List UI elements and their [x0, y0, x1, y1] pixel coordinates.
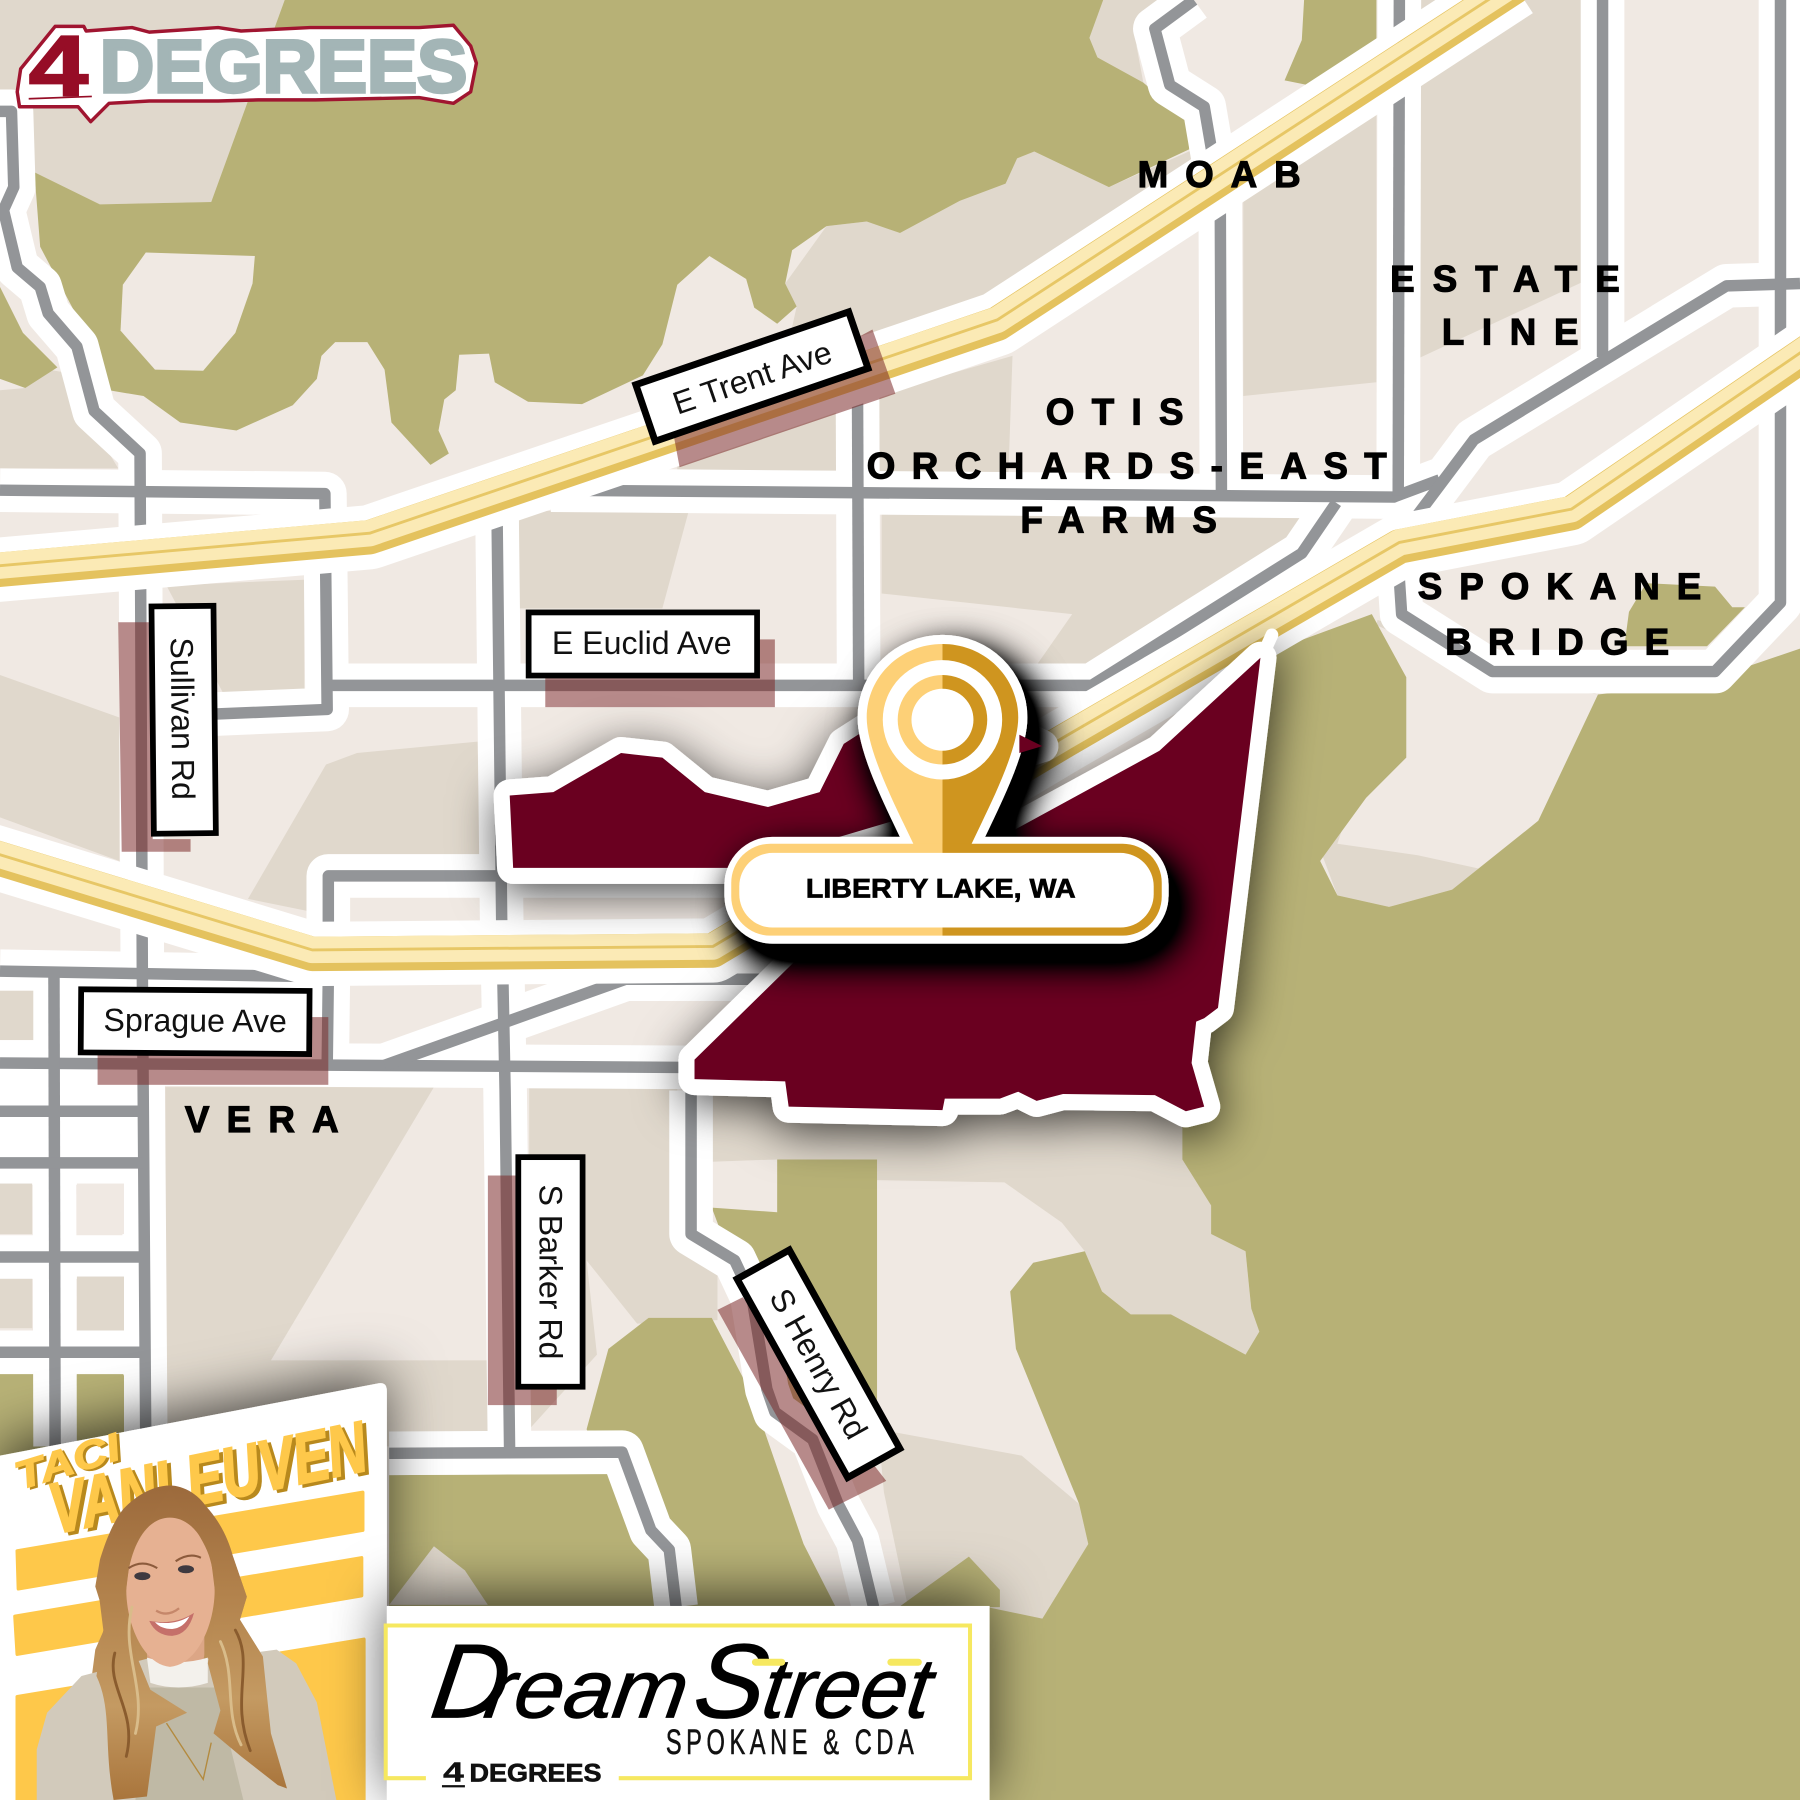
small 4 Degrees logo — [442, 1757, 602, 1788]
street sign: Sullivan Rd: Sullivan Rd — [164, 637, 201, 800]
neighborhood labels: ESTATE — [1390, 259, 1620, 300]
street sign: E Trent Ave: E Trent Ave — [668, 334, 836, 421]
street sign: S Barker Rd: S Barker Rd — [532, 1184, 568, 1359]
Dream Street wordmark: D — [425, 1623, 518, 1740]
neighborhood labels: LINE — [1442, 311, 1578, 352]
neighborhood labels: ORCHARDS-EAST — [867, 446, 1387, 487]
agent name: VANLEUVEN — [47, 1410, 378, 1552]
neighborhood labels: VERA — [185, 1099, 339, 1140]
boundary shape fill — [510, 658, 1260, 1111]
t-cross accents — [752, 1659, 922, 1666]
sweater — [37, 1650, 336, 1800]
street sign: Sprague Ave — [81, 989, 328, 1085]
facial features — [129, 1556, 201, 1636]
Dream Street wordmark — [425, 1623, 944, 1740]
map pin and location label: LIBERTY LAKE, WA — [806, 874, 1076, 904]
back hair — [92, 1485, 287, 1797]
neighborhood labels: SPOKANE — [1418, 566, 1701, 607]
highways — [0, 0, 1800, 954]
4 Degrees logo: 4 — [29, 18, 89, 114]
street sign: Sullivan Rd — [118, 606, 216, 852]
neck and collar — [147, 1624, 204, 1666]
face — [126, 1518, 215, 1667]
street sign: E Trent Ave — [636, 312, 895, 467]
agent portrait — [37, 1485, 336, 1800]
agent card — [0, 1383, 387, 1800]
agent name: TACI — [12, 1427, 130, 1500]
small 4 Degrees logo: DEGREES — [470, 1760, 602, 1788]
neighborhood labels: OTIS — [1046, 392, 1184, 433]
street sign: Sprague Ave: Sprague Ave — [103, 1002, 287, 1039]
agent name: VANLEUVEN — [43, 1408, 374, 1549]
brand card — [386, 1606, 990, 1800]
small 4 Degrees logo: 4 — [443, 1757, 465, 1788]
street sign: E Euclid Ave: E Euclid Ave — [552, 625, 732, 661]
boundary shape sliver beside pin — [1019, 735, 1042, 753]
Liberty Lake boundary shape — [510, 635, 1272, 1111]
Dream Street wordmark: S — [688, 1623, 775, 1740]
neighborhood labels: FARMS — [1021, 500, 1217, 541]
street sign: E Euclid Ave — [529, 612, 775, 707]
neighborhood labels — [185, 154, 1701, 1140]
tagline: SPOKANE & CDA — [666, 1722, 918, 1762]
neighborhood labels: BRIDGE — [1445, 621, 1669, 662]
street sign: S Barker Rd — [488, 1157, 583, 1405]
Dream Street wordmark: ream — [480, 1643, 695, 1735]
4 Degrees logo — [17, 18, 476, 122]
yellow frame — [386, 1626, 970, 1778]
neighborhood labels: MOAB — [1138, 154, 1301, 195]
agent name — [10, 1407, 378, 1553]
yellow stripes — [15, 1492, 364, 1800]
street sign: S Henry Rd — [717, 1250, 900, 1510]
map pin and location label — [724, 644, 1169, 944]
4 Degrees logo: DEGREES — [100, 24, 467, 108]
Dream Street wordmark: treet — [757, 1642, 941, 1736]
street sign: S Henry Rd: S Henry Rd — [762, 1282, 875, 1445]
agent name: TACI — [10, 1426, 127, 1499]
